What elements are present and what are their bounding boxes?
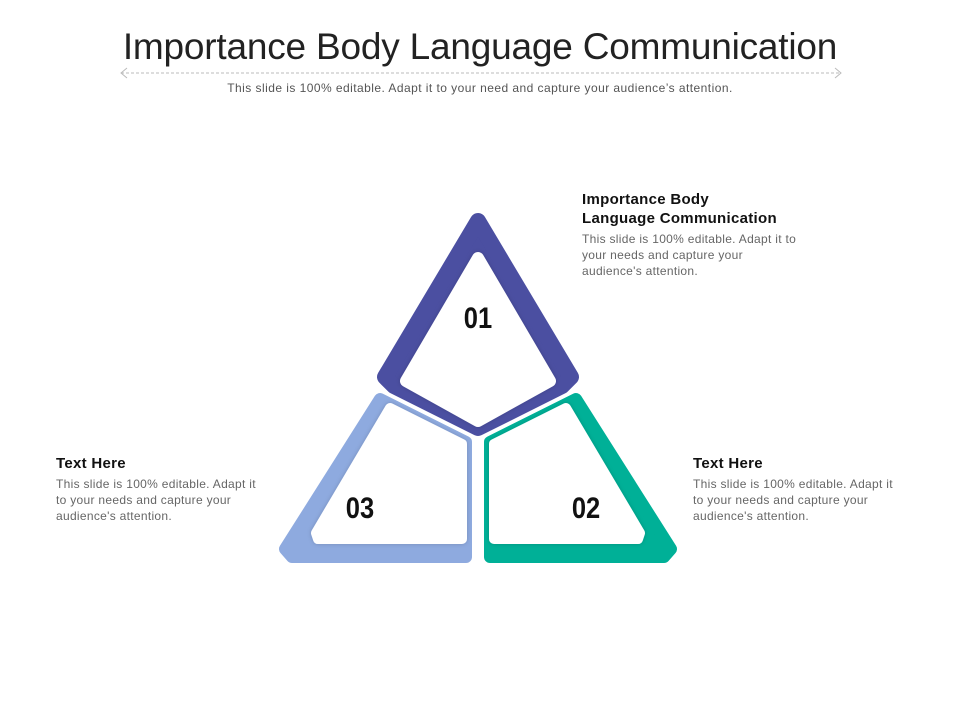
subtitle: This slide is 100% editable. Adapt it to your need and capture your audience’s attention. (227, 81, 733, 95)
text block 02: Text Here (693, 455, 763, 472)
text block 01: Language Communication (582, 210, 777, 227)
segment 02: 02 (572, 491, 600, 524)
text block 02 (693, 455, 893, 523)
text block 02: This slide is 100% editable. Adapt it to your needs and capture your audience's attention. (693, 477, 893, 523)
text block 03: Text Here (56, 455, 126, 472)
text block 03 (56, 455, 256, 523)
text block 01 (582, 191, 796, 278)
segment 03: 03 (346, 491, 374, 524)
text block 03: This slide is 100% editable. Adapt it to your needs and capture your audience's attention. (56, 477, 256, 523)
title: Importance Body Language Communication (123, 26, 837, 67)
segment 03 (285, 399, 466, 557)
text block 01: Importance Body (582, 191, 709, 208)
title divider arrow (120, 68, 842, 78)
segment 01: 01 (464, 301, 492, 334)
segment 02 (490, 399, 671, 557)
text block 01: This slide is 100% editable. Adapt it to your needs and capture your audience's attention. (582, 232, 796, 278)
segment 01 (385, 221, 571, 428)
